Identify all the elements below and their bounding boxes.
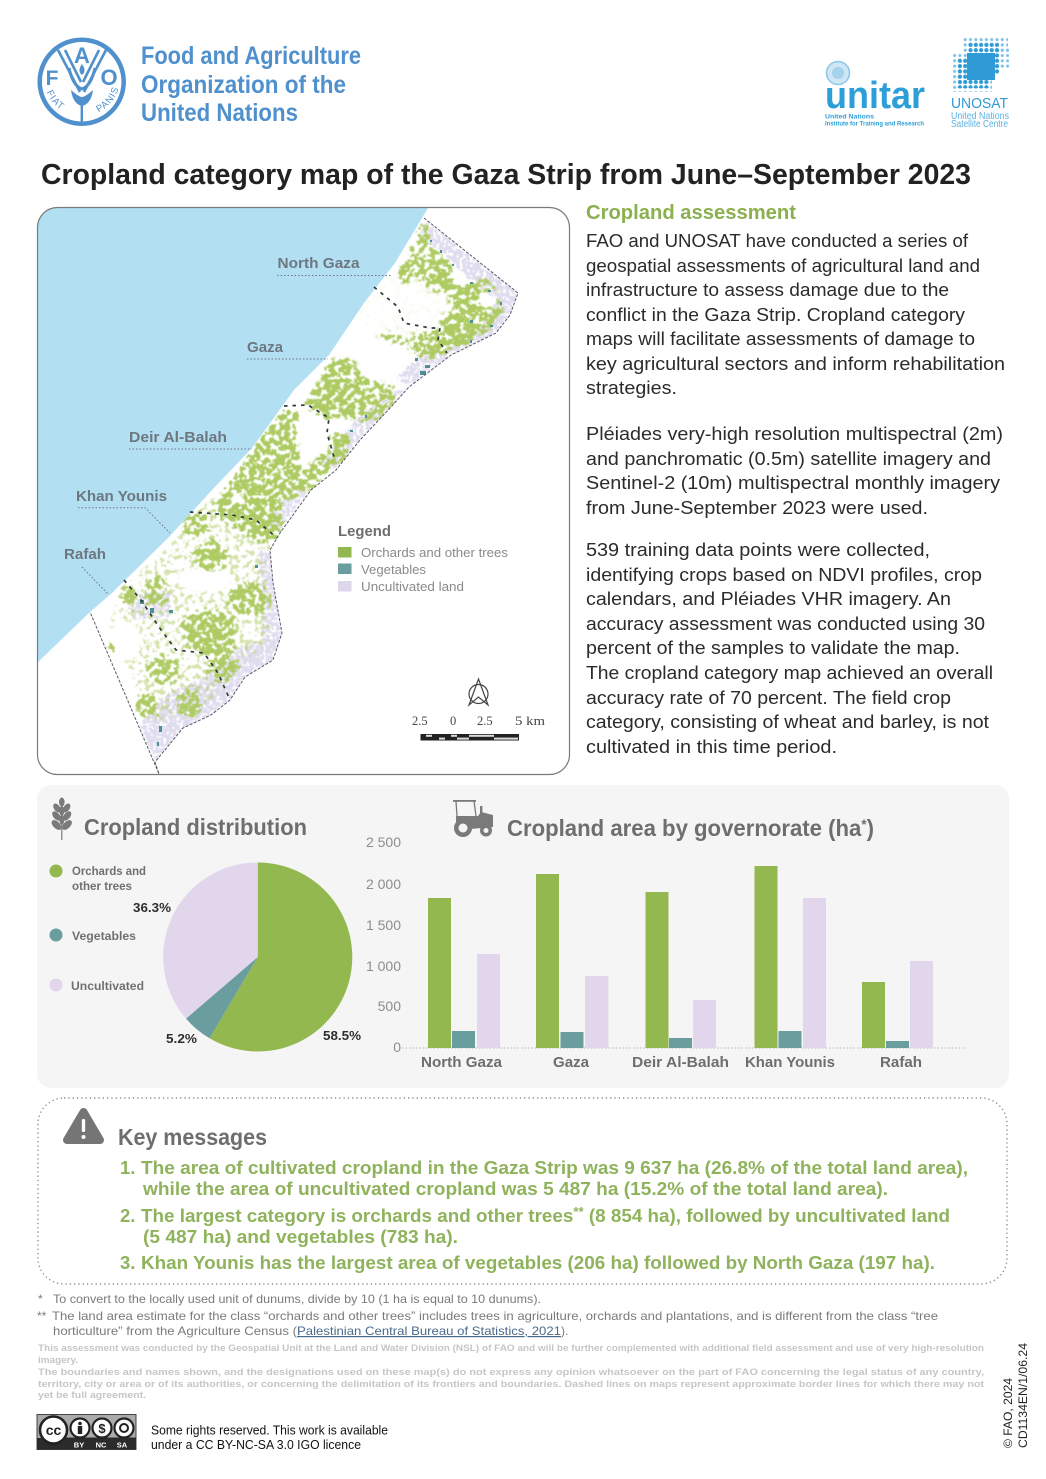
- map label: Gaza: Gaza: [247, 339, 284, 356]
- logo: FAO emblem: FIAT: [46, 90, 64, 108]
- text block: cropland assessment: category, consisting of wheat and barley, is not: [586, 711, 989, 732]
- message 2: **: [573, 1204, 585, 1219]
- pie legend: other trees: [72, 879, 132, 893]
- y axis labels: 1 500: [366, 917, 401, 933]
- map legend: Uncultivated land: [361, 579, 464, 594]
- document code: © FAO, 2024: [1001, 1378, 1015, 1448]
- y axis labels: 2 500: [366, 834, 401, 850]
- bars: Khan Younis: [754, 866, 826, 1048]
- map legend: [338, 523, 508, 594]
- disclaimer: This assessment was conducted by the Geospatial Unit at the Land and Water Division (NSL) of FAO and will be further complemented with additional field assessment and use of very high-resolution: [38, 1343, 984, 1354]
- text block: cropland assessment: geospatial assessments of agricultural land and: [586, 255, 980, 276]
- disclaimer: [38, 1343, 985, 1401]
- logo: FAO emblem: O: [100, 65, 118, 90]
- icon: creative commons badge: NC: [96, 1440, 107, 1450]
- pie legend: [50, 864, 146, 993]
- footnotes: ).: [561, 1324, 568, 1338]
- scale bar: [412, 714, 545, 740]
- footnotes: horticulture” from the Agriculture Census (: [53, 1324, 297, 1338]
- text block: cropland assessment: accuracy assessment was conducted using 30: [586, 613, 985, 634]
- y axis labels: 1 000: [366, 958, 401, 974]
- map: border outline: [90, 218, 518, 774]
- text block: cropland assessment: 539 training data points were collected,: [586, 539, 930, 560]
- logo text: Food and Agriculture Organization of the United Nations: [141, 42, 361, 127]
- logo text: Food and Agriculture Organization of the United Nations: Food and Agriculture: [141, 42, 361, 70]
- bars: Rafah: [862, 961, 933, 1048]
- message 2: 2.: [120, 1205, 135, 1226]
- map label: Rafah: Rafah: [64, 546, 106, 563]
- category labels: [421, 1054, 922, 1071]
- pie chart: 58.5%: [323, 1028, 361, 1043]
- map label: Deir Al-Balah: Deir Al-Balah: [129, 429, 227, 446]
- pie legend: Orchards and: [72, 864, 146, 878]
- map frame border: [38, 208, 570, 774]
- pie chart: [133, 862, 361, 1051]
- icon: creative commons badge: SA: [117, 1440, 128, 1450]
- category labels: North Gaza: [421, 1054, 503, 1071]
- heading: cropland area by governorate: *: [861, 816, 867, 832]
- icon: north arrow: [469, 679, 488, 705]
- text block: cropland assessment: maps will facilitate assessments of damage to: [586, 328, 975, 349]
- footnotes: Palestinian Central Bureau of Statistics, 2021: [297, 1324, 561, 1338]
- document code: [1001, 1343, 1030, 1448]
- text block: cropland assessment: [586, 202, 1005, 757]
- icon: creative commons badge: cc: [46, 1422, 61, 1438]
- category labels: Khan Younis: [745, 1054, 835, 1071]
- licence text: under a CC BY-NC-SA 3.0 IGO licence: [151, 1438, 361, 1452]
- message 3: 3.: [120, 1252, 135, 1273]
- text block: cropland assessment: key agricultural sectors and inform rehabilitation: [586, 353, 1005, 374]
- title: Cropland category map of the Gaza Strip from June–September 2023: [41, 159, 971, 191]
- map legend: Legend: [338, 523, 391, 540]
- text block: cropland assessment: and panchromatic (0.5m) satellite imagery and: [586, 448, 991, 469]
- map label: North Gaza: North Gaza: [278, 255, 360, 272]
- text block: cropland assessment: infrastructure to assess damage due to the: [586, 279, 949, 300]
- heading: cropland area by governorate: Cropland area by governorate (ha: [507, 815, 875, 841]
- message 1: The area of cultivated cropland in the Gaza Strip was 9 637 ha (26.8% of the total land area),: [141, 1157, 968, 1178]
- text block: cropland assessment: from June-September 2023 were used.: [586, 497, 928, 518]
- pie chart: 5.2%: [166, 1031, 197, 1046]
- icon: warning triangle: [67, 1112, 100, 1140]
- rafah: [147, 595, 165, 602]
- scale bar: 5 km: [515, 714, 545, 728]
- footnotes: [37, 1292, 938, 1338]
- gaza: [308, 358, 364, 402]
- logo: FAO emblem: F: [46, 67, 59, 90]
- logo: UNOSAT: UNOSAT: [951, 96, 1008, 112]
- disclaimer: yet be full agreement.: [38, 1390, 146, 1401]
- message 2: (8 854 ha), followed by uncultivated land: [584, 1205, 950, 1226]
- disclaimer: territory, city or area or of its authorities, or concerning the delimitation of its frontiers and boundaries. Dashed lines on maps represent approximate border lines for which there may not: [38, 1379, 985, 1390]
- document code: CD1134EN/1/06.24: [1016, 1343, 1030, 1448]
- map label: North Gaza: [277, 255, 391, 276]
- map: orchards and other trees layer: [105, 223, 505, 728]
- message 1: while the area of uncultivated cropland was 5 487 ha (15.2% of the total land area).: [142, 1178, 888, 1199]
- disclaimer: imagery.: [38, 1355, 78, 1366]
- scale bar: 2.5: [477, 714, 493, 728]
- licence text: Some rights reserved. This work is available: [151, 1424, 388, 1438]
- text block: cropland assessment: Pléiades very-high resolution multispectral (2m): [586, 423, 1003, 444]
- text block: cropland assessment: percent of the samples to validate the map.: [586, 637, 960, 658]
- footnotes: **: [37, 1309, 47, 1323]
- icon: creative commons badge: [37, 1414, 136, 1450]
- category labels: Rafah: [880, 1054, 922, 1071]
- logo: FAO emblem: PANIS: [96, 88, 118, 112]
- icon: creative commons badge: BY: [74, 1440, 84, 1450]
- licence text: [151, 1424, 388, 1452]
- panel: map: [30, 200, 570, 774]
- message 3: Khan Younis has the largest area of vegetables (206 ha) followed by North Gaza (197 ha).: [141, 1252, 935, 1273]
- logo text: Food and Agriculture Organization of the United Nations: Organization of the: [141, 71, 346, 99]
- pie legend: Uncultivated: [71, 979, 144, 993]
- text block: cropland assessment: The cropland category map achieved an overall: [586, 662, 993, 683]
- bars: North Gaza: [428, 898, 500, 1048]
- pie chart: 36.3%: [133, 900, 171, 915]
- khan younis: [215, 490, 285, 540]
- icon: tractor: [453, 800, 493, 837]
- bar chart: [366, 834, 966, 1071]
- logo: UNOSAT: United Nations: [951, 111, 1009, 122]
- logo: UNOSAT: [951, 37, 1009, 130]
- y axis labels: 2 000: [366, 876, 401, 892]
- sea: [30, 200, 431, 670]
- y axis labels: [366, 834, 401, 1055]
- panel: charts background: [37, 785, 1009, 1088]
- map label: Gaza: [247, 339, 328, 359]
- panel: key messages: [38, 1098, 1007, 1284]
- map label: Khan Younis: [76, 488, 170, 533]
- scale bar: 0: [450, 714, 456, 728]
- heading: key messages: Key messages: [118, 1124, 267, 1150]
- text block: cropland assessment: identifying crops based on NDVI profiles, crop: [586, 564, 982, 585]
- map label: Rafah: [64, 546, 108, 594]
- text block: cropland assessment: Sentinel-2 (10m) multispectral monthly imagery: [586, 472, 1001, 493]
- map legend: Orchards and other trees: [361, 545, 508, 560]
- heading: cropland distribution: Cropland distribution: [84, 814, 307, 840]
- y axis labels: 0: [393, 1039, 401, 1055]
- text block: cropland assessment: calendars, and Pléiades VHR imagery. An: [586, 588, 951, 609]
- logo: UNITAR: unitar: [825, 75, 925, 117]
- bars: Gaza: [536, 874, 608, 1048]
- map legend: Vegetables: [361, 562, 426, 577]
- footnotes: To convert to the locally used unit of dunums, divide by 10 (1 ha is equal to 10 dunums).: [53, 1292, 541, 1306]
- map label: Khan Younis: Khan Younis: [76, 488, 167, 505]
- icon: wheat: [50, 798, 74, 840]
- footnotes: *: [38, 1292, 43, 1306]
- deir al-balah: [222, 408, 330, 505]
- message 2: [120, 1204, 950, 1247]
- logo: FAO emblem: A: [74, 43, 90, 68]
- y axis labels: 500: [378, 998, 401, 1014]
- message 1: [120, 1157, 968, 1199]
- pie legend: Vegetables: [72, 929, 136, 943]
- north gaza: [416, 223, 430, 245]
- bars: Deir Al-Balah: [646, 892, 716, 1048]
- text block: cropland assessment: cultivated in this time period.: [586, 736, 837, 757]
- message 2: The largest category is orchards and other trees: [141, 1205, 566, 1226]
- text block: cropland assessment: Cropland assessment: [586, 202, 796, 224]
- logo: UNOSAT: Satellite Centre: [951, 119, 1008, 130]
- footnotes: The land area estimate for the class “orchards and other trees” includes trees in agriculture, orchards and plantations, and is different from the class “tree: [52, 1309, 938, 1323]
- map: vegetables patches: [140, 240, 502, 746]
- text block: cropland assessment: conflict in the Gaza Strip. Cropland category: [586, 304, 966, 325]
- message 1: 1.: [120, 1157, 135, 1178]
- logo: UNITAR: [825, 62, 925, 128]
- sparse scatter sheets: [360, 266, 456, 352]
- logo: UNITAR: United Nations: [825, 114, 875, 120]
- map: governorate boundaries: [124, 287, 447, 700]
- logo text: Food and Agriculture Organization of the United Nations: United Nations: [141, 99, 298, 127]
- text block: cropland assessment: strategies.: [586, 377, 677, 398]
- map label: Deir Al-Balah: [129, 429, 252, 449]
- logo: UNITAR: Institute for Training and Research: [825, 122, 924, 128]
- disclaimer: The boundaries and names shown, and the designations used on these map(s) do not express any opinion whatsoever on the part of FAO concerning the legal status of any country,: [38, 1367, 984, 1378]
- text block: cropland assessment: accuracy rate of 70 percent. The field crop: [586, 687, 951, 708]
- logo: FAO emblem: [37, 38, 126, 126]
- map: uncultivated land layer: [125, 220, 518, 762]
- icon: creative commons badge: $: [98, 1421, 106, 1436]
- category labels: Deir Al-Balah: [632, 1054, 729, 1071]
- scale bar: 2.5: [412, 714, 428, 728]
- message 2: (5 487 ha) and vegetables (783 ha).: [143, 1226, 458, 1247]
- category labels: Gaza: [553, 1054, 590, 1071]
- text block: cropland assessment: FAO and UNOSAT have conducted a series of: [586, 230, 969, 251]
- heading: cropland area by governorate: ): [867, 815, 874, 841]
